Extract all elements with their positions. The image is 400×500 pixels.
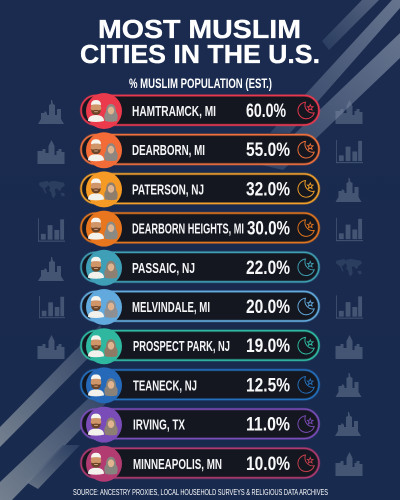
value: 60.0%: [246, 101, 286, 122]
icon: crescent: [298, 181, 314, 197]
city name: PROSPECT PARK, NJ: [133, 338, 230, 355]
city name: PATERSON, NJ: [132, 181, 204, 198]
row: Passaic: [81, 250, 319, 286]
icon: people: [88, 100, 118, 122]
subtitle: % MUSLIM POPULATION (EST.): [129, 76, 272, 91]
value: 55.0%: [246, 140, 290, 161]
row: Teaneck: [81, 367, 319, 403]
icon: crescent: [298, 298, 314, 315]
icon: crescent: [298, 377, 314, 393]
row: Dearborn: [81, 132, 319, 168]
icon: people: [88, 218, 118, 240]
icon: people: [88, 453, 118, 475]
icon: crescent: [298, 259, 314, 276]
row: Prospect Park: [81, 328, 319, 364]
value: 22.0%: [246, 258, 290, 279]
icon: people: [88, 296, 118, 318]
diagonal bands: top right: [262, 0, 400, 170]
icon: people: [88, 139, 118, 161]
badge: Melvindale: [86, 289, 122, 325]
value: 10.0%: [246, 454, 290, 475]
city name: MINNEAPOLIS, MN: [133, 456, 222, 473]
row: Irving: [81, 407, 319, 443]
city name: MELVINDALE, MI: [132, 299, 210, 316]
icon: crescent: [298, 141, 314, 158]
icon: people: [88, 257, 118, 279]
city name: TEANECK, NJ: [133, 377, 197, 394]
city name: PASSAIC, NJ: [132, 260, 195, 277]
background icons: right column: [335, 100, 363, 476]
value: 20.0%: [246, 297, 290, 318]
diagonal bands: bottom left: [0, 325, 112, 500]
title: [80, 14, 320, 69]
badge: Teaneck: [86, 367, 122, 403]
badge: Minneapolis: [86, 446, 122, 482]
badge: Dearborn Heights: [86, 211, 122, 247]
background icons: left column: [38, 100, 65, 359]
row: Hamtramck: [81, 93, 319, 129]
value: 19.0%: [246, 336, 290, 357]
badge: Passaic: [86, 250, 122, 286]
value: 30.0%: [247, 219, 290, 240]
badge: Irving: [86, 407, 122, 443]
city name: DEARBORN HEIGHTS, MI: [132, 221, 244, 238]
row: Minneapolis: [81, 446, 319, 482]
badge: Prospect Park: [86, 328, 122, 364]
city name: IRVING, TX: [133, 417, 185, 434]
title: CITIES IN THE U.S.: [80, 39, 320, 69]
badge: Paterson: [86, 171, 122, 207]
icon: people: [88, 178, 118, 200]
badge: Hamtramck: [86, 93, 122, 129]
value: 12.5%: [246, 375, 290, 396]
row: Dearborn Heights: [81, 211, 319, 247]
value: 32.0%: [246, 179, 290, 200]
icon: crescent: [298, 337, 314, 354]
icon: people: [88, 374, 118, 396]
city name: DEARBORN, MI: [132, 142, 205, 159]
icon: crescent: [298, 102, 314, 119]
row: Melvindale: [81, 289, 319, 325]
icon: people: [88, 335, 118, 357]
badge: Dearborn: [86, 132, 122, 168]
icon: crescent: [298, 455, 314, 472]
icon: people: [88, 414, 118, 436]
value: 11.0%: [246, 415, 290, 436]
row: Paterson: [81, 171, 319, 207]
icon: crescent: [298, 416, 314, 432]
title: MOST MUSLIM: [98, 14, 301, 44]
city name: HAMTRAMCK, MI: [132, 103, 216, 120]
icon: crescent: [298, 220, 314, 236]
